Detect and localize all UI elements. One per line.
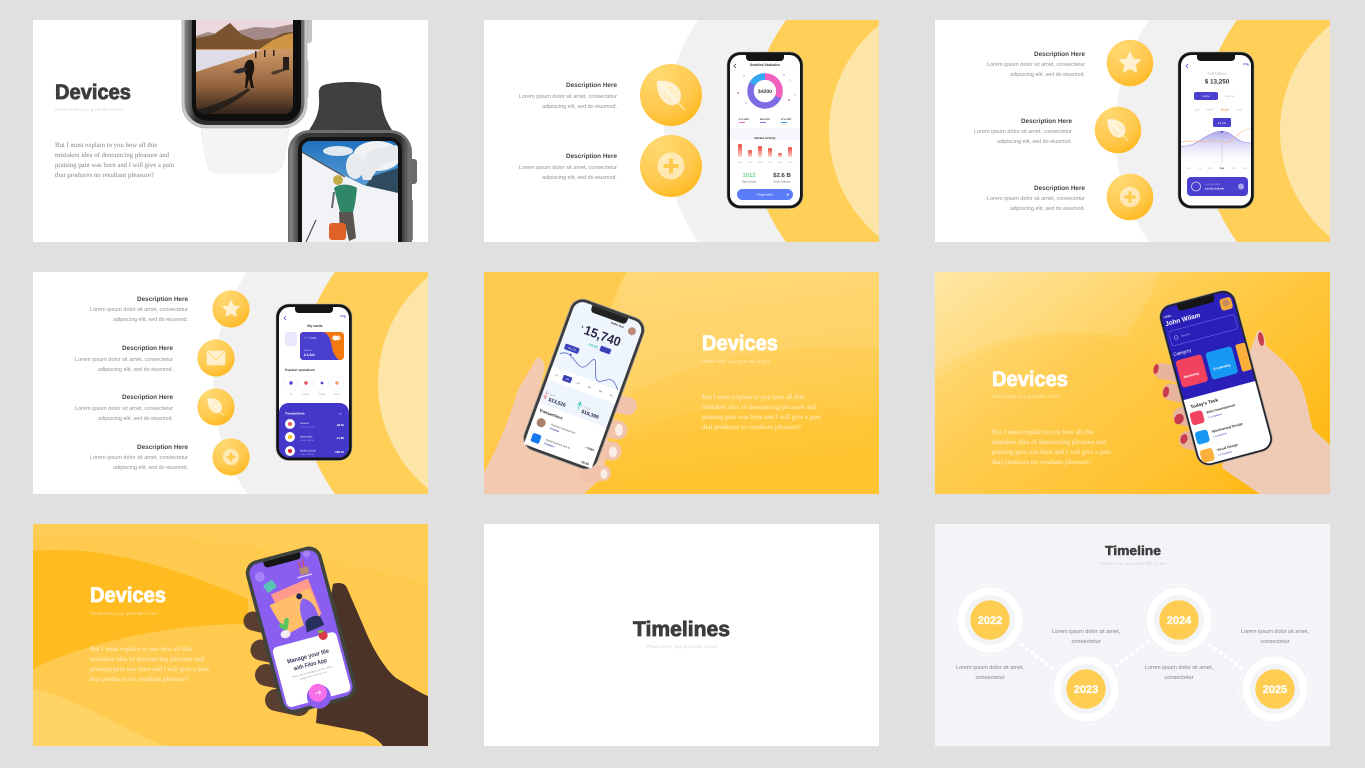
dotted connector 2023 to 2024 (1115, 640, 1149, 667)
phone: balance with chart: $18,399 (580, 409, 600, 421)
background arcs (664, 20, 879, 242)
background arcs (1116, 20, 1330, 242)
operation tiles (284, 376, 344, 390)
phone: my cards: All (339, 412, 342, 416)
phone: John Wilam task app: Search (1180, 332, 1191, 338)
label 2022: consectetur (976, 675, 1005, 681)
description 2: Description Here (122, 345, 173, 352)
phone: total balance: Your credit limit (1205, 183, 1220, 186)
card: manage file: with Filoo App (292, 657, 328, 673)
body text (55, 142, 175, 179)
body text: that produces no resultant pleasure? (55, 172, 154, 179)
phone: my cards: McDonald's (300, 436, 313, 438)
dotted connector 2022 to 2023 (1020, 643, 1054, 670)
description 2: adipiscing elit, sed do eiusmod. (997, 138, 1072, 145)
hand: holding phone (1153, 330, 1330, 494)
description 1: Lorem ipsum dolor sit amet, consectetur (987, 61, 1085, 68)
description 3: Description Here (122, 394, 173, 401)
button (737, 189, 793, 200)
description 1 (987, 51, 1085, 78)
phone: detailed statistics: 27% BRC (739, 118, 750, 121)
description 1: adipiscing elit, sed do eiusmod. (113, 316, 188, 323)
card: manage file: images docs and soo on (299, 671, 328, 681)
milestone 2023: 2023 (1074, 684, 1098, 696)
label 2022 (956, 664, 1024, 681)
panel: slide 1 devices with watches (33, 20, 428, 242)
body text: mistaken idea of denouncing pleasure and (702, 404, 817, 411)
label 2023: consectetur (1072, 639, 1101, 645)
panel: slide 2 two descriptions with statistics phone (484, 20, 879, 242)
donut chart: $4200 (758, 89, 772, 95)
phone: total balance: $ 8,750 of $5,000 (1205, 188, 1225, 190)
milestone 2022: 2022 (978, 615, 1002, 627)
phone: John Wilam task app: Today's Task (1190, 397, 1219, 409)
phone: my cards: All (290, 393, 293, 396)
bank card (300, 332, 344, 360)
heading: Devices: Devices (702, 332, 778, 355)
phone: John Wilam task app: John Wilam (1165, 312, 1201, 328)
description 2 (974, 118, 1072, 145)
label 2025: consectetur (1260, 639, 1290, 645)
description 2: Lorem ipsum dolor sit amet, consectetur (75, 356, 173, 363)
description 3: Lorem ipsum dolor sit amet, consectetur (987, 195, 1085, 202)
phone: John Wilam task app: 4 Completed (1213, 432, 1228, 439)
description 4: Description Here (137, 444, 188, 451)
device: silver watch with beach photo (182, 20, 312, 174)
description 3: adipiscing elit, sed do eiusmod. (1010, 205, 1085, 212)
phone: my cards: 7 Nov, 2:54 PM (300, 453, 314, 456)
phone: detailed statistics: 6 AM (738, 161, 743, 164)
credit limit panel (1187, 177, 1248, 196)
phone: balance with chart: +$1,724 (567, 346, 577, 352)
description 2 (519, 153, 617, 181)
bank card: $ 1,524 (304, 353, 315, 357)
line chart (1181, 118, 1251, 166)
phone: detailed statistics: Progression (757, 192, 773, 196)
hand: holding phone (484, 358, 628, 494)
body text (992, 429, 1112, 466)
label 2023: Lorem ipsum dolor sit amet, (1052, 628, 1120, 635)
phone: balance with chart: Dropbox (544, 442, 555, 449)
panel: slide 7 devices yellow with dark hand (33, 524, 428, 746)
phone: my cards (276, 304, 352, 460)
phone: balance with chart: Transactions (539, 407, 564, 421)
phone: detailed statistics: 1012 (742, 172, 756, 179)
phone: total balance: $ 13,250 (1205, 78, 1230, 86)
phone: my cards: Food (334, 393, 340, 396)
panel: slide 3 three descriptions with balance phone (935, 20, 1330, 242)
phone: my cards: 8 Nov, 3:54 PM (300, 439, 314, 442)
phone: total balance: Aug (1208, 167, 1213, 170)
panel: slide 8 timelines section title (484, 524, 879, 746)
description 4 (90, 444, 188, 471)
phone: balance with chart: - $9.99 (579, 459, 590, 466)
phone: John Wilam task app: 3 Completed (1218, 450, 1233, 457)
phone: detailed statistics: 8 AM (778, 161, 783, 164)
description 1: Lorem ipsum dolor sit amet, consectetur (90, 306, 188, 313)
phone: total balance: Year (1236, 108, 1242, 112)
phone: detailed statistics: Detailed Statistics (750, 63, 780, 67)
illustration: image card (263, 579, 277, 593)
phone: John Wilam task app (1157, 288, 1275, 468)
icon: leaf (1095, 107, 1141, 153)
phone: balance with chart: Income (584, 406, 592, 411)
body text: praising pain was born and I will give a pain (55, 162, 175, 169)
heading: Devices: Devices (90, 584, 166, 607)
phone: John Wilam task app: Web Development (1206, 403, 1236, 415)
subtitle: Please enter your great title is here (55, 107, 123, 112)
phone: detailed statistics: 7 AM (768, 161, 773, 164)
body text (90, 646, 210, 683)
label 2022: Lorem ipsum dolor sit amet, (956, 664, 1024, 671)
body text: praising pain was born and I will give a pain (702, 414, 822, 421)
phone: total balance (1178, 52, 1254, 208)
description 3: Description Here (1034, 185, 1085, 192)
phone: John Wilam task app: 2 Completed (1208, 413, 1223, 419)
body text: But I must explain to you how all this (702, 394, 804, 401)
phone: my cards: Popular operations (285, 368, 315, 372)
icon: star (1107, 40, 1153, 86)
phone: total balance: Month (1221, 108, 1229, 112)
phone: John Wilam task app: Wireframing Design (1211, 422, 1243, 434)
phone: detailed statistics: 27% XRP (781, 118, 792, 121)
panel: slide 4 four descriptions with cards phone (33, 272, 428, 494)
phone: detailed statistics: 9 AM (788, 161, 793, 164)
body text: mistaken idea of denouncing pleasure and (90, 656, 205, 663)
bank card: Balance (304, 349, 313, 352)
description 1: adipiscing elit, sed do eiusmod. (542, 103, 617, 110)
icon: plus (1107, 174, 1153, 220)
phone: my cards: Transactions (285, 412, 305, 416)
body text (702, 394, 822, 431)
panel: slide 5 devices yellow with light hand (484, 272, 879, 494)
phone: detailed statistics: Open Deals (742, 180, 757, 184)
phone: balance with chart: Payment received from (551, 423, 576, 435)
body text: praising pain was born and I will give a pain (90, 666, 210, 673)
description 1: Lorem ipsum dolor sit amet, consectetur (519, 93, 617, 100)
body text: praising pain was born and I will give a pain (992, 449, 1112, 456)
transactions panel (279, 403, 349, 458)
milestone 2022 (954, 584, 1026, 656)
phone: my cards: -585.02 (334, 450, 344, 454)
icon: leaf (640, 64, 702, 126)
device: dark watch with mountaineer photo (288, 82, 417, 242)
phone: balance with chart: 15,740 (582, 322, 623, 349)
phone: total balance: Oct (1232, 167, 1236, 170)
phone: detailed statistics: 8 AM (748, 161, 753, 164)
label 2025 (1241, 628, 1309, 645)
description 1 (519, 82, 617, 110)
phone: my cards: Medical Center (300, 450, 316, 452)
milestone 2025 (1239, 653, 1311, 725)
subtitle: Please enter your great title is here (1099, 561, 1167, 566)
dotted connector 2024 to 2025 (1208, 643, 1243, 670)
phone: total balance: Nov (1243, 167, 1248, 170)
phone: John Wilam task app: E-Learning (1213, 363, 1231, 371)
phone: total balance: Jun (1187, 167, 1192, 170)
label 2024 (1145, 664, 1213, 681)
icon: star (212, 290, 250, 328)
heading: Devices: Devices (992, 368, 1068, 391)
panel: slide 9 timeline (935, 524, 1330, 746)
phone: my cards: -48.65 (336, 423, 344, 427)
phone: detailed statistics: Market Activity (754, 136, 776, 140)
illustration: folder and person (265, 577, 325, 640)
phone: my cards: Amazon (300, 422, 309, 425)
phone: detailed statistics: $2.6 B (773, 172, 792, 179)
description 2 (75, 345, 173, 373)
phone: John Wilam task app: Hello, (1163, 313, 1173, 319)
description 1: adipiscing elit, sed do eiusmod. (1010, 71, 1085, 78)
phone: John Wilam task app: Category (1173, 347, 1193, 357)
phone: total balance: Day (1195, 108, 1200, 112)
icon: leaf (197, 388, 235, 426)
milestone 2024 (1143, 584, 1215, 656)
icon: plus (640, 135, 702, 197)
description 3 (987, 185, 1085, 212)
description 3: Lorem ipsum dolor sit amet, consectetur (75, 405, 173, 412)
line chart: $ 3,240 (1218, 122, 1227, 125)
phone: balance with chart: 1M (576, 381, 580, 385)
phone: balance with chart: Amanda (549, 427, 560, 433)
phone: total balance: Total balance (1207, 72, 1227, 76)
milestone 2023 (1050, 653, 1122, 725)
phone: my cards: Health (303, 393, 310, 396)
phone: total balance: Savings (1225, 95, 1235, 98)
description 1: Description Here (137, 296, 188, 303)
illustration: pen cup (293, 558, 312, 579)
phone: balance with chart: 1W (565, 377, 570, 382)
card: manage file: Easy way to manage your file, video (292, 665, 333, 679)
description 4: Lorem ipsum dolor sit amet, consectetur (90, 454, 188, 461)
donut chart (750, 76, 780, 106)
phone: John Wilam task app: Marketing (1183, 371, 1199, 379)
body text: that produces no resultant pleasure? (702, 424, 801, 431)
background arcs (213, 272, 428, 494)
phone: balance with chart: 1D (554, 374, 558, 378)
line chart (554, 348, 627, 393)
description 1: Description Here (566, 82, 617, 89)
milestone 2024: 2024 (1167, 615, 1192, 627)
phone: detailed statistics: Deals Volume (773, 180, 791, 184)
body text: But I must explain to you how all this (90, 646, 192, 653)
phone: balance with chart: +18.6% (587, 342, 599, 350)
phone: balance with chart: 6M (598, 390, 602, 394)
phone: detailed statistics: 56% ETH (760, 118, 770, 121)
phone: my cards: My cards (307, 324, 323, 328)
phone: balance with chart: Airpod payment sent to (545, 438, 571, 450)
phone: balance with chart: Total Spent (544, 391, 556, 398)
phone: my cards: Travel (319, 393, 326, 396)
phone: detailed statistics: 8 AM (758, 161, 763, 164)
body text: mistaken idea of denouncing pleasure and (55, 152, 170, 159)
icon: plus (212, 438, 250, 476)
label 2024: consectetur (1164, 675, 1194, 681)
description 2: Description Here (566, 153, 617, 160)
body text: But I must explain to you how all this (55, 142, 157, 149)
phone: my cards: -21.86 (336, 436, 344, 440)
description 1 (90, 296, 188, 323)
description 2: Lorem ipsum dolor sit amet, consectetur (519, 164, 617, 171)
bar chart (738, 144, 792, 157)
card: manage file (272, 631, 354, 717)
phone: balance with chart: ALL (609, 394, 615, 398)
phone: balance with chart: Hello Sue (610, 321, 625, 329)
phone: John Wilam task app: Visual Design (1216, 443, 1239, 452)
phone: balance with chart: $ (581, 325, 584, 329)
description 2: adipiscing elit, sed do eiusmod. (98, 366, 173, 373)
description 3 (75, 394, 173, 422)
phone: total balance: Sep (1220, 167, 1225, 170)
description 2: Lorem ipsum dolor sit amet, consectetur (974, 128, 1072, 135)
phone: total balance: Jul (1198, 167, 1202, 170)
milestone 2025: 2025 (1263, 684, 1287, 696)
phone: total balance: Week (1206, 108, 1214, 112)
hand: holding phone (253, 583, 428, 746)
category tiles (1175, 354, 1209, 388)
label 2024: Lorem ipsum dolor sit amet, (1145, 664, 1213, 671)
phone: balance with chart: + $350 (585, 445, 595, 452)
heading: Timeline: Timeline (1105, 543, 1161, 558)
phone: detailed statistics (727, 52, 803, 208)
panel: slide 6 devices yellow with red nail hand (935, 272, 1330, 494)
body text: that produces no resultant pleasure? (992, 459, 1091, 466)
phone: total balance: Home (1203, 95, 1210, 98)
description 3: adipiscing elit, sed do eiusmod. (98, 415, 173, 422)
subtitle: Please enter your great title is here (647, 644, 717, 649)
card: manage file: Manage your file (286, 647, 330, 666)
illustration: apple (317, 628, 329, 641)
phone: balance with chart: 3M (587, 386, 591, 389)
label 2025: Lorem ipsum dolor sit amet, (1241, 628, 1309, 635)
description 2: adipiscing elit, sed do eiusmod. (542, 174, 617, 181)
phone: balance with chart (520, 295, 648, 473)
heading: Devices: Devices (55, 81, 131, 104)
description 2: Description Here (1021, 118, 1072, 125)
phone: my cards: 12 Nov, 5:25 AM (300, 426, 315, 428)
body text: that produces no resultant pleasure? (90, 676, 189, 683)
phone: balance with chart: $13,526 (547, 397, 567, 409)
description 4: adipiscing elit, sed do eiusmod. (113, 464, 188, 471)
description 1: Description Here (1034, 51, 1085, 58)
body text: mistaken idea of denouncing pleasure and (992, 439, 1107, 446)
label 2023 (1052, 628, 1120, 645)
heading: Timelines: Timelines (633, 618, 730, 641)
subtitle: Please enter your great title is here (992, 394, 1060, 399)
phone: file manager app (243, 544, 360, 718)
body text: But I must explain to you how all this (992, 429, 1094, 436)
icon: mail (197, 339, 235, 377)
bank card: * * * * 4543 (304, 337, 317, 340)
subtitle: Please enter your great title is here (702, 359, 770, 364)
subtitle: Please enter your great title is here (90, 611, 158, 616)
